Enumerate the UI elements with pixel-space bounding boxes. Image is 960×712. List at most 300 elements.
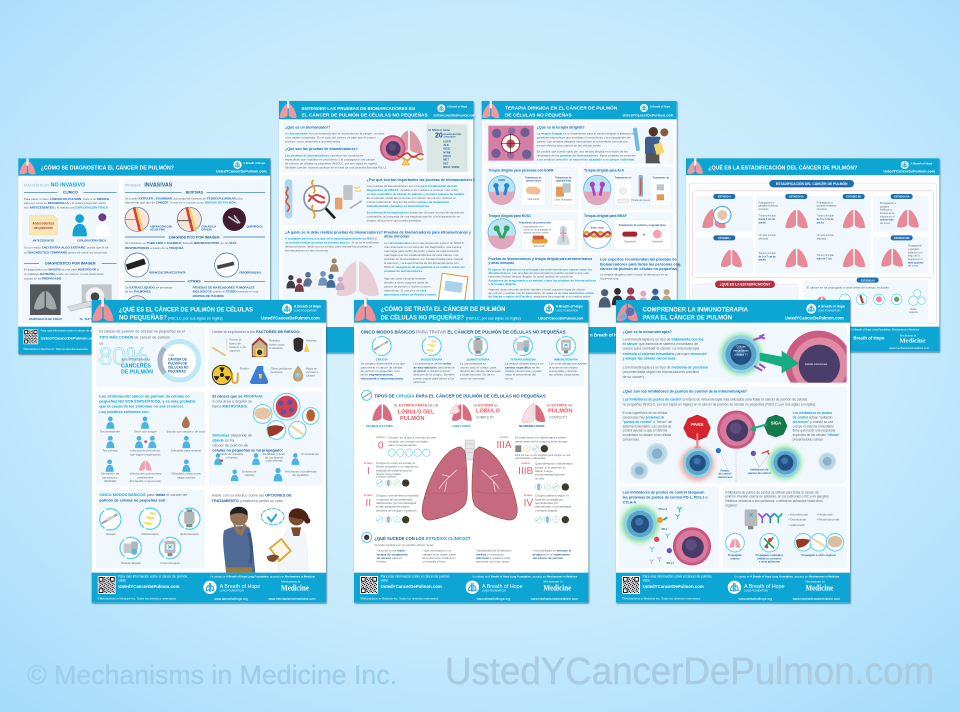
section: clinical trials: ¿QUÉ SUCEDE CON LOS ESTUDIOS CLÍNICOS? — [374, 536, 471, 541]
panel: five basic ways: tal de segmentectomía, — [361, 373, 393, 377]
footer: www.abreathofhope.org — [477, 597, 510, 601]
panel: African American and experts: y la terapia dirigida. — [488, 282, 517, 286]
panel: African American and experts — [485, 255, 681, 327]
panel: five basic ways: cambio específico en las — [505, 365, 540, 369]
footer: ©Mechanisms in Medicine Inc. Todos los derechos reservados — [98, 596, 177, 600]
panel: five basic ways: TERAPIA DIRIGIDA — [510, 358, 536, 362]
panel: non invasive: DIAGNÓSTICOS — [24, 183, 50, 188]
panel: African American and experts: La terapia dirigida puede marcar la diferencia en su — [600, 273, 668, 277]
panel: symptoms: (bronquitis o neumonía) — [130, 479, 161, 483]
panel: five basic ways: al sistema inmunitario — [549, 365, 578, 369]
panel: EGFR: Osimertinib — [527, 198, 540, 201]
panel: prevalence: DE PULMÓN — [121, 367, 153, 375]
panel: who can receive: o zona pulmonar — [759, 560, 780, 564]
panel: staging diagram: afectado — [817, 237, 827, 240]
footer — [18, 327, 270, 354]
panel: staging diagram: tráquea en el — [908, 258, 923, 261]
panel: who should be tested: A cualquier persona a la que se le haya diagnosticado un NSCLC — [285, 236, 378, 240]
panel: non invasive: TC, TEP Y RESONANCIA — [79, 317, 111, 321]
panel: who should be tested: cáncer de pulmón y reciben menos — [384, 284, 431, 288]
panel: what is targeted therapy: cáncer. Las terapias dirigidas interrumpen el crecimiento tumoral con — [537, 139, 628, 143]
footer: ©Mechanisms in Medicine Inc. Todos los derechos reservados — [360, 596, 439, 600]
panel: five basic ways: puede usarse para aliviar a los — [413, 376, 454, 380]
panel: non invasive: RADIOGRAFÍA DE TÓRAX — [29, 316, 62, 321]
panel: who can receive: • Nivolumab — [817, 512, 833, 516]
stage II: o seguida de quimioterapia, — [376, 497, 413, 501]
panel: what is a biomarker: o los tejidos corporales. En el caso del cáncer, es algo que el cuerpo — [285, 135, 376, 139]
panel: metastasis: de los brazos — [265, 455, 283, 459]
panel: who should be tested: biomarcadores en otro momento. — [285, 248, 329, 252]
panel: staging diagram: ESTADIO IIA — [789, 196, 804, 199]
panel: checkpoint inhibitors: cancerosas hay proteínas de — [623, 415, 665, 419]
panel: five basic ways: después de la cirugía. También — [413, 373, 455, 377]
header: UstedYCancerDePulmon.com — [216, 170, 267, 174]
panel: metastasis: de equilibrio — [293, 473, 309, 477]
header: LUNG FOUNDATION — [556, 309, 578, 312]
section: surgery types: LOBECTOMÍA — [452, 423, 471, 428]
panel: stage IV: Otros — [910, 308, 917, 311]
panel: importance: su tipo específico de cáncer de pulmón y la mejor manera de tratarlo. — [367, 192, 465, 196]
panel: stage IV: órganos — [909, 311, 919, 314]
panel: risk factors: el amianto — [269, 346, 283, 350]
footer: visite: — [381, 579, 389, 583]
panel: checkpoint proteins: PD-L1 — [667, 562, 674, 565]
panel: what is targeted therapy: ¿Qué es la terapia dirigida? — [537, 125, 585, 129]
panel: prevalence: más — [168, 353, 174, 357]
header: A Breath of Hope — [650, 106, 671, 109]
footer: Mechanisms in — [281, 580, 301, 584]
panel: what is targeted therapy: menos efectos secundarios en las células sanas. — [537, 143, 602, 147]
panel: non invasive: Para saber si tiene CÁNCER DE PULMÓN, visite a un MÉDICO — [24, 196, 110, 201]
footer: UstedYCancerDePulmon.com — [643, 584, 704, 589]
header: USTEDYCANCERDEPULMON.COM — [433, 114, 475, 117]
panel: symptoms: pequeñas NO SON ESPECÍFICOS, y es más probable — [99, 399, 196, 404]
footer: www.mechanismsinmedicine.com — [531, 597, 578, 601]
section: clinical trials: médica y la atención — [476, 552, 504, 556]
section: clinical trials: del cáncer de pulmón — [533, 556, 564, 560]
panel: ALK: Tratamiento de — [652, 176, 670, 179]
panel: what is immunotherapy: Células — [736, 344, 746, 348]
section: clinical trials: de acceso para su — [377, 556, 402, 560]
footer: www.mechanismsinmedicine.com — [889, 346, 930, 350]
panel: African American and experts: de pulmón y reciben menos tratamiento. Si usted es de raza americana, nativo — [488, 291, 594, 295]
panel: African American and experts: Algunas otras minorías también tienden a tener mayores tasas de cáncer — [488, 287, 585, 291]
panel: what is a biomarker: ¿Qué es un biomarcador? — [285, 125, 331, 129]
section: surgery types: Se EXTIRPA EL — [473, 403, 499, 407]
panel: staging diagram: de 5 a 7 cm de — [817, 218, 834, 221]
panel: invasive — [123, 179, 268, 323]
stage IV — [524, 494, 572, 523]
panel: prevalence: PULMÓN DE — [168, 361, 187, 366]
panel: treatments: pulmón de células no pequeñas son: — [99, 498, 167, 502]
panel: staging diagram: ancho — [759, 259, 766, 262]
panel: metastasis: células no pequeñas se ha propagado: — [212, 449, 283, 453]
panel: BRAF: + — [643, 232, 646, 238]
panel: staging diagram: Propagación a — [758, 201, 775, 204]
panel: metastasis — [209, 392, 322, 486]
panel: invasive: PRUEBAS DE MARCADORES TUMORALES — [193, 286, 255, 290]
panel: staging diagram: Propagación a — [880, 202, 897, 205]
stage II: después de cirugía o radiación — [376, 508, 417, 512]
panel: non invasive: del paciente — [34, 226, 53, 230]
panel: what is immunotherapy: inmunitarias — [733, 348, 749, 352]
panel: metastasis: llama METÁSTASIS. — [212, 404, 248, 409]
panel: ALK: Terapia dirigida para ALK — [584, 169, 625, 173]
panel: staging diagram: ESTADIFICACIÓN DEL CÁNCER DE PULMÓN — [776, 181, 848, 186]
panel: staging diagram: más de 7 cm — [817, 257, 832, 260]
stage IIIB: IIIB — [518, 466, 533, 477]
panel: treatments: Inmunoterapia — [160, 561, 180, 565]
stage IIIA: quimioterapia y radioterapia — [515, 457, 546, 460]
panel: staging diagram: cercanos — [817, 208, 828, 211]
panel: checkpoint inhibitors: presentadoras cáncer. — [793, 438, 824, 442]
panel: prevalence: CÉLULAS NO — [168, 365, 189, 370]
stage I: lóbulo completo o un segmento), — [376, 465, 419, 469]
footer: Medicine — [899, 338, 926, 345]
panel: non invasive: DIAGNÓSTICO POR IMAGEN — [45, 261, 96, 266]
panel: symptoms: Esputo con sangre o de color — [167, 430, 205, 434]
stage I: seguida de tratamientos en — [376, 468, 412, 472]
panel: what is targeted therapy: Es posible que pueda optar por una terapia dirigida en función de los — [537, 149, 628, 153]
panel: metastasis: Síntomas (depende de — [212, 434, 252, 438]
footer: UstedYCancerDePulmon.com — [118, 584, 180, 589]
panel: symptoms: que la causa de los síntomas no sea el cáncer. — [99, 405, 184, 409]
panel: who should be tested: Los afroamericanos son más propensos a tener un NSCLC — [384, 241, 465, 245]
stage IV: lugar de propagación, — [535, 497, 564, 501]
panel: what is immunotherapy: (recomendada según los biomarcadores precisos — [623, 370, 699, 374]
panel: staging diagram: linfáticos a lo — [908, 251, 923, 254]
panel: what is a biomarker: específicas que impulsan el crecimiento y la propagación del cáncer — [285, 158, 375, 162]
panel: ROS1: Especialmente si el — [523, 226, 544, 229]
section: clinical trials: Cuando participa en un estudio clínico, tiene: — [374, 543, 434, 547]
section: clinical trials: terapia de vanguardia — [377, 552, 408, 556]
panel: invasive: Se puede EXTRAER y EXAMINAR una pequeña muestra de TEJIDO PULMONAR para — [125, 197, 243, 201]
panel: what is staging: ¿QUÉ ES LA ESTADIFICACIÓN? — [720, 282, 770, 287]
panel: importance — [282, 175, 475, 225]
panel: five basic ways: La quimioterapia se — [460, 362, 486, 366]
panel: non invasive: EXPLORACIÓN FÍSICA — [77, 237, 106, 242]
panel: who should be tested: pruebas de biomarcadores. — [384, 269, 423, 273]
stage II — [364, 494, 419, 523]
stage I — [364, 461, 419, 487]
stage I: Cirugía (lo mejor es extraer el — [376, 461, 416, 465]
panel: ALK: Tratamiento de — [615, 176, 632, 179]
panel: staging diagram: ancho — [759, 221, 766, 224]
illustration: patient and doctor — [223, 507, 310, 573]
panel: who should be tested: tienden a tener mayores tasas de — [384, 280, 429, 284]
panel: treatments: Quimioterapia — [180, 532, 199, 536]
panel: checkpoint inhibitors: de control actúan "quitando — [793, 415, 833, 419]
panel: ALK: Prueba de nuevos — [631, 199, 651, 202]
panel: who can receive: • Atezolizumab — [788, 512, 808, 516]
panel: what is a biomarker: de pulmón de células no pequeñas (NSCLC, por sus siglas en inglés). — [285, 162, 378, 166]
panel: metastasis: Convulsiones — [301, 452, 319, 456]
text: talk to your doctor — [212, 493, 292, 503]
stage IIIA: El tratamiento y la radioterapia pueden — [515, 436, 567, 440]
panel: checkpoint inhibitors: ¿Qué son los inhibidores de puntos de control de la inmunoterapia? — [623, 390, 748, 394]
footer — [616, 573, 850, 603]
panel: risk factors: Agua en — [306, 366, 317, 370]
panel: stage IV: ESTADIO IV — [861, 279, 875, 282]
section: surgery types: COMPLETO — [476, 416, 494, 420]
panel: five basic ways — [358, 326, 587, 387]
panel: treatments: Terapia dirigida — [121, 561, 141, 565]
stage IIIB: Quimioterapia y radioterapia — [535, 462, 573, 466]
header: UstedYCancerDePulmon.com — [623, 113, 674, 117]
panel: invasive: CON AGUJA — [201, 225, 216, 228]
panel: African American and experts: de Alaska o nativo del Pacífico, asegúrese de preguntar a su médico sobre — [488, 295, 591, 299]
stage II: si hay ganglios afectados — [376, 505, 410, 509]
panel: checkpoint proteins: CTLA-4. — [623, 500, 637, 504]
footer: ©Mechanisms in Medicine Inc. Todos los derechos reservados — [622, 596, 701, 600]
panel: non invasive: sus ANTECEDENTES y si realiza una EXPLORACIÓN FÍSICA. — [24, 204, 109, 209]
panel: non invasive: para ver cómo se DESARROLLA y si realiza preguntas sobre — [24, 201, 106, 205]
panel: invasive: QUIRÚRGICA — [247, 225, 263, 228]
panel: what is immunotherapy: ¿Qué es la inmunoterapia? — [623, 330, 672, 334]
panel: what is a biomarker: BRAF V600E — [443, 165, 460, 169]
panel: checkpoint inhibitors: los frenos" y cuando se usa — [793, 420, 833, 424]
panel: treatments — [96, 490, 205, 568]
panel: who should be tested: otras minorías — [384, 235, 409, 239]
panel: non invasive: un hallazgo EXTRAÑO puede ser cáncer, o para determinar — [24, 271, 104, 276]
panel: five basic ways: tratar el crecimiento del — [505, 373, 536, 377]
header: A Breath of Hope — [447, 106, 468, 109]
header — [482, 101, 677, 119]
panel: African American and experts: Los expertos recomiendan las pruebas de — [600, 258, 677, 262]
panel: African American and experts: y otras minorías — [488, 261, 514, 265]
panel: staging diagram: Tumor principal — [759, 252, 776, 255]
panel: who should be tested — [282, 228, 472, 327]
panel: staging diagram: ancho — [817, 221, 824, 224]
panel: five basic ways: CINCO MODOS BÁSICOS PARA TRATAR EL CÁNCER DE PULMÓN DE CÉLULAS NO PEQUEÑAS — [361, 330, 566, 335]
panel: staging diagram: Propagación — [908, 245, 923, 248]
poster: diagnosis (back left) — [18, 158, 270, 354]
panel: who can receive: pulmón. Pueden usarse en adelante, en los pulmones o IIIC y en ganglios — [725, 495, 829, 499]
panel: who should be tested: dichas pruebas, hable con su médico para realizar las pruebas de — [285, 244, 372, 248]
panel: five basic ways: INMUNOTERAPIA — [554, 358, 578, 362]
panel: what is a biomarker: NTRK — [443, 150, 451, 154]
panel: symptoms: que siguen regresando — [130, 452, 161, 456]
panel: what is a biomarker: EGFR — [443, 139, 451, 143]
section: clinical trials: adicional a médicos para — [476, 556, 511, 560]
header — [18, 158, 270, 176]
panel: risk factors: pulmón o — [306, 370, 319, 374]
panel: who can receive: • Ipilimumab — [788, 523, 805, 527]
panel: ROS1: cáncer se ha propagado al — [523, 229, 551, 232]
panel: African American and experts: biomarcadores para todas las personas con — [600, 262, 681, 266]
header: LUNG FOUNDATION — [294, 309, 317, 312]
panel: importance: compartida, la búsqueda de una segunda opinión o la búsqueda de un — [367, 215, 460, 219]
panel: checkpoint inhibitors: sistema inmunitario. Los puntos de — [623, 424, 672, 428]
header: A Breath of Hope — [818, 305, 845, 309]
panel: who can receive: linfáticos cercanos a sus pulmones, o detrás de pulmones hacia otros — [725, 499, 823, 503]
section: surgery types — [362, 390, 573, 428]
panel: risk factors: Asbesto — [306, 339, 317, 343]
panel: five basic ways: lobectomía o neumonectomía. — [361, 376, 404, 380]
panel: non invasive: NO INVASIVO — [51, 183, 85, 189]
section: surgery types: SEGMENTECTOMÍA — [366, 423, 393, 428]
panel: five basic ways: ciclos de semanas. — [460, 376, 486, 380]
panel: treatments: Cirugía — [106, 532, 116, 536]
panel: five basic ways: RADIOTERAPIA — [421, 358, 442, 362]
footer: Mechanisms in — [900, 335, 917, 338]
header — [354, 297, 588, 323]
panel: symptoms: Toser con sangre — [134, 430, 157, 434]
stage IV: quimioterapia y/o — [535, 501, 558, 505]
footer: www.mechanismsinmedicine.com — [793, 597, 840, 601]
panel: metastasis: o las piernas — [266, 459, 283, 463]
panel: African American and experts: supervivencia. — [600, 276, 619, 280]
footer: Medicine — [805, 583, 833, 593]
panel: who can receive — [723, 487, 847, 568]
panel: ROS1: Entrectinib — [534, 245, 546, 248]
panel: treatments: Radioterapia — [142, 532, 159, 536]
stage IIIA — [497, 436, 571, 460]
panel: African American and experts: Asegúrese de preguntarle a su médico sobre las pruebas de biomarcadores — [488, 278, 596, 282]
header: LUNG FOUNDATION — [818, 309, 841, 312]
panel: checkpoint inhibitors: PARE — [691, 422, 704, 427]
panel: EGFR: Otros inhibidores — [555, 198, 573, 201]
panel: prevalence: TIPO MÁS COMÚN de cáncer de pulmón. — [99, 335, 171, 340]
panel: what is targeted therapy: genéticas específicas que impulsan el crecimiento y la propagación del — [537, 135, 631, 139]
watermark: website: UstedYCancerDePulmon.com — [445, 651, 934, 693]
panel: what is immunotherapy: cuerpo para combatir el cáncer. La inmunoterapia — [623, 346, 699, 350]
panel: symptoms: debilidad — [104, 479, 116, 483]
panel: staging diagram: ganglios linfáticos — [817, 205, 837, 208]
stage IV: o terapia dirigida — [535, 508, 557, 512]
section: surgery types: PULMÓN — [400, 414, 425, 422]
header — [616, 300, 850, 323]
panel: symptoms: Infecciones de pulmón — [130, 449, 161, 453]
panel: who should be tested: Pruebas de biomarcadores para afroamericanos y — [384, 230, 472, 234]
section: clinical trials: progreso en el tratamiento — [533, 552, 570, 556]
panel: BRAF: Dabrafenib — [624, 240, 636, 243]
panel: five basic ways: tumor. — [505, 376, 513, 380]
panel: staging diagram — [689, 180, 937, 323]
header: ¿QUÉ ES EL CÁNCER DE PULMÓN DE CÉLULAS — [119, 306, 253, 314]
stage IIIA: IIIA — [497, 440, 512, 451]
panel: metastasis: Dolor de espalda — [220, 452, 243, 456]
panel: EGFR — [486, 167, 578, 210]
panel: staging diagram: Tumor principal — [817, 215, 834, 218]
illustration: large lungs — [422, 440, 517, 520]
panel: non invasive: Antecedentes — [32, 222, 54, 226]
footer: Para más información sobre el cáncer de pulmón, — [381, 575, 450, 579]
panel: staging diagram: Un solo pulmón — [817, 234, 835, 237]
panel: who can receive: • Pembrolizumab — [817, 518, 840, 522]
section: clinical trials: • acceso a una mejor — [377, 549, 406, 553]
panel: what is a biomarker: ROS1 — [443, 147, 451, 151]
panel: staging diagram: Un solo pulmón — [759, 234, 777, 237]
stage 0: ESTADIO — [376, 436, 385, 439]
footer: A Breath of Hope — [744, 584, 785, 590]
panel: BRAF: Terapia dirigida para BRAF — [584, 214, 627, 218]
panel: checkpoint inhibitors: SIGA — [771, 421, 782, 426]
footer: Un trabajo de A Breath of Hope Lung Foundation, apoyado por Mechanisms in Medicine — [734, 574, 840, 578]
stage IIIA: Para los que no son elegibles para cirugía, se usa — [515, 454, 571, 457]
panel: risk factors: químicos — [271, 370, 283, 374]
stage 0 — [376, 436, 436, 456]
panel: what is immunotherapy: La inmunoterapia es un tipo de tratamiento con los — [623, 338, 704, 342]
panel: symptoms: Tos persistente — [100, 430, 120, 434]
panel: checkpoint proteins: CTLA-4 — [658, 508, 668, 511]
panel: five basic ways: La terapia dirigida ataca a un — [505, 362, 544, 366]
panel: symptoms: tragar comida — [177, 475, 195, 479]
panel: checkpoint inhibitors: inmunitario no ataque a las células — [623, 433, 672, 437]
header — [92, 297, 326, 323]
stage II: Cirugía, normalmente precedida — [376, 494, 419, 498]
stage I: I — [367, 466, 370, 477]
panel: African American and experts: personas reciban terapia dirigida. Si usted padece de cáncer de — [488, 275, 573, 279]
panel: what is immunotherapy: el cáncer que estimula el sistema inmunitario de — [623, 342, 698, 346]
stage IV: IV — [524, 498, 533, 509]
footer — [686, 327, 939, 352]
section: surgery types: Se EXTIRPA UN — [547, 403, 573, 407]
footer: Un trabajo de A Breath of Hope Lung Foundation, apoyado por Mechanisms in Medicine — [472, 574, 578, 578]
header: EL CÁNCER DE PULMÓN DE CÉLULAS NO PEQUEÑAS — [302, 111, 428, 119]
footer: www.abreathofhope.org — [739, 597, 772, 601]
panel: metastasis: Hinchazón o problemas — [285, 470, 317, 474]
panel: importance: Las pruebas de biomarcadores son una parte fundamental de todo — [367, 184, 458, 188]
panel: invasive: OTRAS — [188, 280, 201, 284]
section: clinical trials: un estudio clínico — [422, 560, 446, 564]
panel: checkpoint inhibitors: "puntos de control" o "frenos" del — [623, 420, 672, 424]
panel: stage IV: El cáncer se ha propagado a otras áreas del cuerpo, incluidas: — [807, 285, 890, 289]
panel: importance: En el pasado, todas las personas con cáncer de pulmón recibían el — [367, 196, 456, 200]
panel: non invasive — [22, 179, 119, 323]
panel: who can receive: interno — [730, 556, 740, 560]
footer: LUNG FOUNDATION — [220, 589, 244, 592]
poster: immunotherapy (front right) — [616, 300, 852, 603]
panel: risk factors — [209, 327, 322, 387]
panel: five basic ways: Su cirujano determinará si su tipo — [361, 362, 405, 366]
header: A Breath of Hope — [243, 161, 265, 165]
panel: metastasis: cáncer de pulmón de — [212, 444, 248, 448]
panel: five basic ways: síntomas. — [413, 380, 426, 384]
footer: UstedYCancerDePulmon.com — [381, 584, 442, 589]
panel: prevalence: CÁNCER DE — [168, 357, 187, 362]
footer: © A Breath of Hope Lung Foundation, Mechanisms in Medicine — [850, 329, 920, 332]
panel: risk factors: Radón — [240, 366, 249, 370]
footer: Mechanisms in — [543, 580, 563, 584]
header: UstedYCancerDePulmon.com — [261, 316, 320, 321]
stage 0: escisión con margen de tejido — [388, 439, 428, 443]
panel: what is a biomarker: El NSCLC tiene — [428, 128, 450, 132]
panel: EGFR: EGFR — [498, 180, 505, 182]
panel: invasive: Se EXTRAE LÍQUIDO de alrededor — [125, 285, 172, 290]
panel: symptoms: Infecciones pulmonares — [130, 472, 162, 476]
panel: who can receive: Propagado a ganglios — [755, 553, 784, 557]
footer: visite: — [118, 579, 127, 583]
panel: what is immunotherapy: (células T) — [734, 352, 748, 356]
panel: five basic ways: las células cancerosas — [549, 373, 580, 377]
panel: what is a biomarker: 20 — [435, 133, 443, 140]
panel: who can receive: linfáticos cercanos — [757, 556, 782, 560]
panel: risk factors: cáncer — [306, 374, 315, 378]
panel: staging diagram: ganglios — [880, 205, 890, 208]
panel: checkpoint inhibitors: explosiva de las células "células" — [793, 433, 840, 437]
footer — [279, 327, 473, 353]
panel: prevalence: CÁNCERES — [121, 362, 151, 369]
panel: what is a biomarker: También pueden mostrar cambios en el nivel de una proteína llamada PD-L1. — [285, 166, 388, 170]
panel: five basic ways: células cancerosas y puede — [505, 369, 542, 373]
panel: prevalence: El cáncer de pulmón de células no pequeñas es el — [99, 330, 185, 334]
footer: Breath of Hope — [853, 335, 885, 340]
header: COMPRENDER LA INMUNOTERAPIA — [643, 308, 749, 314]
watermark: copyright: © Mechanisms in Medicine Inc. — [27, 660, 397, 690]
stage IIIB: un año — [535, 476, 544, 480]
panel: five basic ways: y tratar tumores. Se da en — [460, 373, 495, 377]
